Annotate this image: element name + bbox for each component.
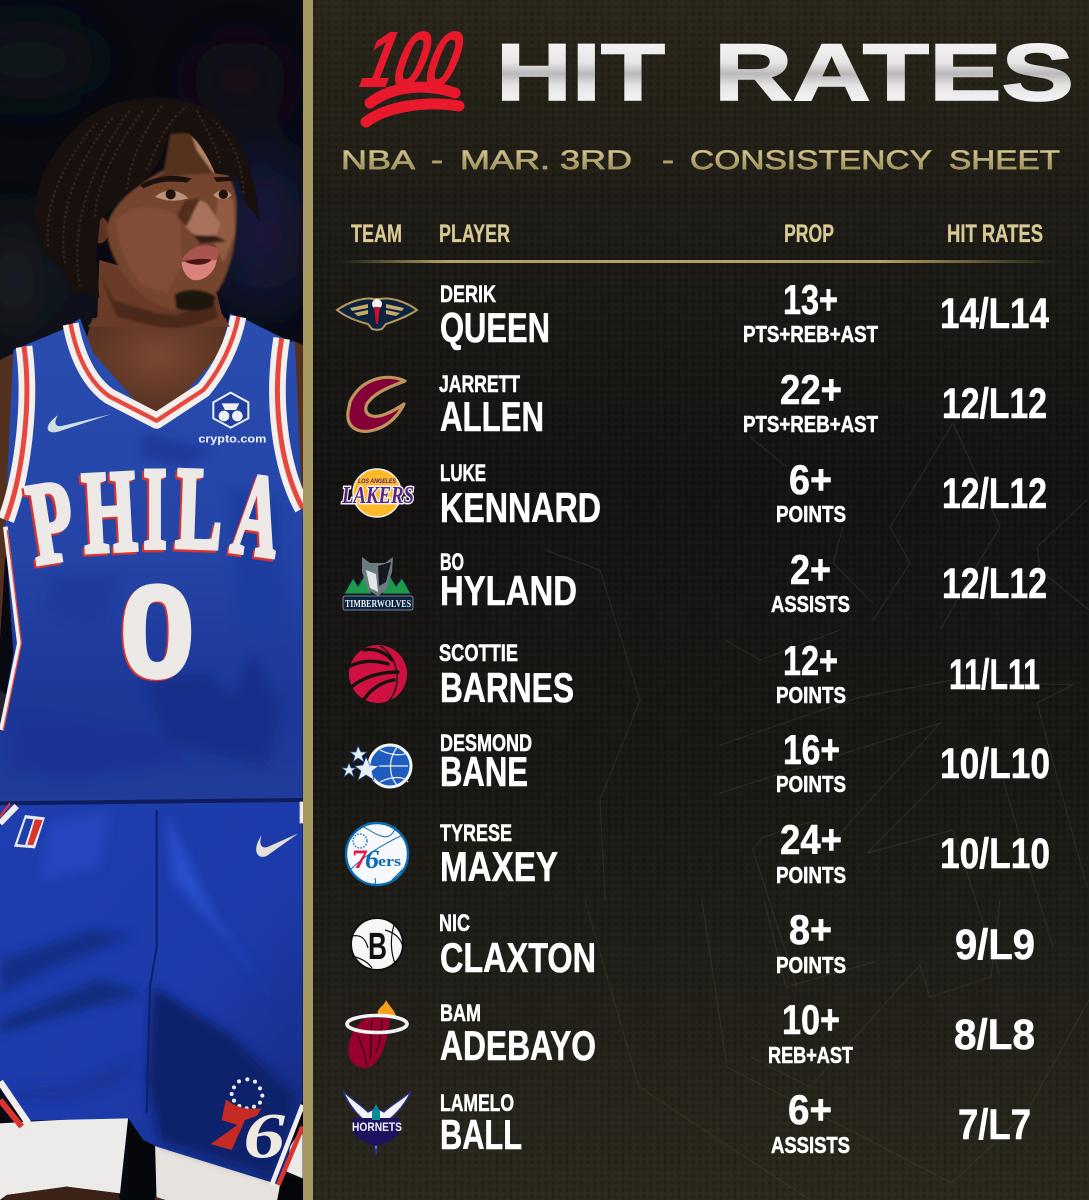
player name: DESMOND (440, 730, 532, 757)
player name: JARRETT (439, 371, 520, 398)
player name: QUEEN (440, 304, 550, 351)
prop (776, 456, 846, 527)
prop: PTS+REB+AST (743, 321, 878, 347)
row: Bo Hyland (343, 546, 1047, 617)
icon: Pelicans logo (337, 298, 417, 330)
icon: Nets logo (351, 918, 403, 970)
prop: ASSISTS (771, 1132, 850, 1158)
title: HIT RATES: RATES (714, 28, 1074, 118)
prop: 10+ (782, 996, 840, 1043)
icon: Magic logo (342, 745, 411, 787)
prop: POINTS (776, 501, 846, 527)
icon: 76ers logo (346, 823, 408, 885)
hit rate: 12/L12 (942, 470, 1047, 518)
row: Tyrese Maxey (346, 816, 1050, 890)
shorts side trim (0, 802, 303, 1185)
player photo: Tyrese Maxey (0, 0, 307, 1200)
panel: dark carbon background (303, 0, 1089, 1200)
jersey lettering PHILA: P (20, 455, 83, 590)
subtitle: MAR. 3RD (460, 145, 632, 175)
player name: BO (440, 549, 464, 576)
icon: Nets logo: B (368, 926, 387, 968)
player name (439, 910, 596, 981)
player name (440, 820, 558, 890)
prop: 6+ (789, 456, 832, 503)
prop: 8+ (789, 906, 832, 953)
player name: HYLAND (440, 567, 577, 614)
prop: POINTS (776, 952, 846, 978)
armhole trim (1, 338, 303, 730)
subtitle: - (431, 145, 443, 175)
title: HIT RATES (496, 28, 1074, 118)
row: Bam Adebayo (347, 996, 1035, 1069)
subtitle: CONSISTENCY (690, 145, 932, 175)
76ers shorts logo (210, 1077, 285, 1158)
jersey lettering PHILA (21, 468, 276, 569)
icon: Hornets logo (343, 1091, 411, 1155)
player name: LUKE (440, 460, 486, 487)
jersey lettering PHILA: I (143, 444, 167, 573)
player name: KENNARD (440, 484, 601, 531)
jersey fold shading (10, 433, 283, 780)
player name (439, 640, 574, 711)
row: Luke Kennard (341, 456, 1047, 531)
title: HIT RATES: HIT (496, 28, 665, 118)
crypto.com sponsor: crypto.com (198, 434, 267, 446)
icon: Raptors logo (346, 645, 407, 703)
jersey lettering PHILA: L (174, 444, 225, 574)
shorts fold shading (0, 810, 297, 1177)
icon: Lakers logo (341, 469, 414, 517)
76ers shorts logo: 6 (243, 1100, 286, 1172)
prop: POINTS (776, 862, 846, 888)
prop: 12+ (783, 637, 838, 684)
row: LaMelo Ball (343, 1086, 1031, 1158)
hit rate: 14/L14 (940, 290, 1049, 338)
crypto.com sponsor (198, 393, 267, 446)
prop (776, 816, 846, 888)
title: 100 emoji: 100 (354, 15, 471, 105)
lips (182, 246, 220, 280)
prop: 6+ (788, 1086, 832, 1133)
hit rate: 8/L8 (954, 1011, 1035, 1059)
row: Desmond Bane (342, 726, 1050, 797)
row: Jarrett Allen (348, 366, 1047, 440)
prop: ASSISTS (771, 591, 850, 617)
player name: CLAXTON (440, 934, 596, 981)
arena background (0, 0, 303, 360)
player name (439, 371, 544, 440)
row: Derik Queen (337, 276, 1049, 351)
player name: BALL (440, 1111, 522, 1158)
icon: Timberwolves logo: TIMBERWOLVES (345, 598, 411, 610)
jersey number 0: 0 (120, 559, 195, 705)
subtitle: SHEET (949, 145, 1060, 175)
NBA logo patch (14, 815, 45, 848)
goatee (175, 290, 215, 311)
prop: 16+ (783, 726, 840, 773)
player name: BAM (440, 1000, 481, 1027)
player name (440, 549, 577, 614)
arms and chest (0, 318, 303, 760)
player name (440, 281, 550, 351)
player name (440, 730, 532, 795)
row: Scottie Barnes (346, 637, 1040, 711)
player name: DERIK (440, 281, 497, 308)
icon: Lakers logo: LAKERS (341, 483, 414, 509)
prop: 13+ (783, 276, 838, 323)
prop (771, 1086, 850, 1158)
jersey lettering PHILA: A (226, 449, 289, 583)
icon: Cavaliers logo (348, 377, 405, 431)
subtitle: - (662, 145, 674, 175)
prop: REB+AST (768, 1042, 853, 1068)
hit rate: 12/L12 (942, 380, 1047, 428)
player name: MAXEY (440, 843, 558, 890)
hit rate: 9/L9 (955, 921, 1035, 969)
player name: BARNES (440, 664, 574, 711)
icon: Lakers logo: LOS ANGELES (358, 479, 396, 485)
ear (98, 217, 108, 244)
prop (743, 276, 878, 347)
prop: 22+ (780, 366, 842, 413)
head and hair (35, 98, 259, 328)
player name (440, 460, 601, 531)
neck trim (71, 317, 238, 421)
watermark logo outline (545, 423, 1089, 1200)
table header: HIT RATES (947, 220, 1043, 248)
hit rate: 10/L10 (940, 830, 1050, 878)
nike swoosh on shorts (256, 833, 298, 857)
prop: POINTS (776, 682, 846, 708)
icon: Heat logo (347, 1000, 407, 1068)
prop (776, 906, 846, 978)
nike swoosh (48, 414, 112, 432)
icon: Hornets logo: HORNETS (352, 1120, 402, 1134)
gold vertical divider bar (303, 0, 313, 1200)
face (107, 133, 237, 311)
subtitle (341, 145, 1060, 175)
table header (351, 220, 1043, 248)
hit rate: 12/L12 (942, 560, 1047, 608)
player name: LAMELO (440, 1090, 514, 1117)
shorts (0, 800, 303, 1200)
player name: SCOTTIE (439, 640, 518, 667)
prop: 24+ (780, 816, 842, 863)
eyes and brows (140, 176, 235, 201)
player name (440, 1090, 522, 1158)
hair (35, 98, 259, 298)
hit rate: 10/L10 (940, 740, 1050, 788)
player name: ADEBAYO (440, 1022, 596, 1069)
row: Nic Claxton (351, 906, 1035, 981)
icon: 76ers logo: ers (378, 854, 401, 870)
prop: PTS+REB+AST (743, 411, 878, 437)
prop (776, 726, 846, 797)
table header: TEAM (351, 220, 402, 248)
icon: Timberwolves logo (343, 557, 413, 610)
player name: TYRESE (440, 820, 512, 847)
player name: ALLEN (440, 393, 544, 440)
table header: PLAYER (439, 220, 510, 248)
neck (87, 260, 230, 327)
player name: BANE (440, 748, 528, 795)
title: 100 emoji (354, 15, 471, 122)
prop (771, 546, 850, 617)
table header: PROP (784, 220, 834, 248)
prop (776, 637, 846, 708)
prop: POINTS (776, 771, 846, 797)
prop: 2+ (790, 546, 831, 593)
hit rate: 11/L11 (949, 651, 1040, 699)
jersey lettering PHILA: H (80, 446, 140, 578)
hit rate: 7/L7 (958, 1101, 1031, 1149)
prop (743, 366, 878, 437)
player name: NIC (439, 910, 470, 937)
icon: 76ers logo: 6 (365, 845, 379, 874)
player name (440, 1000, 596, 1069)
jersey (0, 313, 303, 803)
subtitle: NBA (341, 145, 415, 175)
icon: 76ers logo: 7 (352, 845, 368, 874)
prop (768, 996, 853, 1068)
